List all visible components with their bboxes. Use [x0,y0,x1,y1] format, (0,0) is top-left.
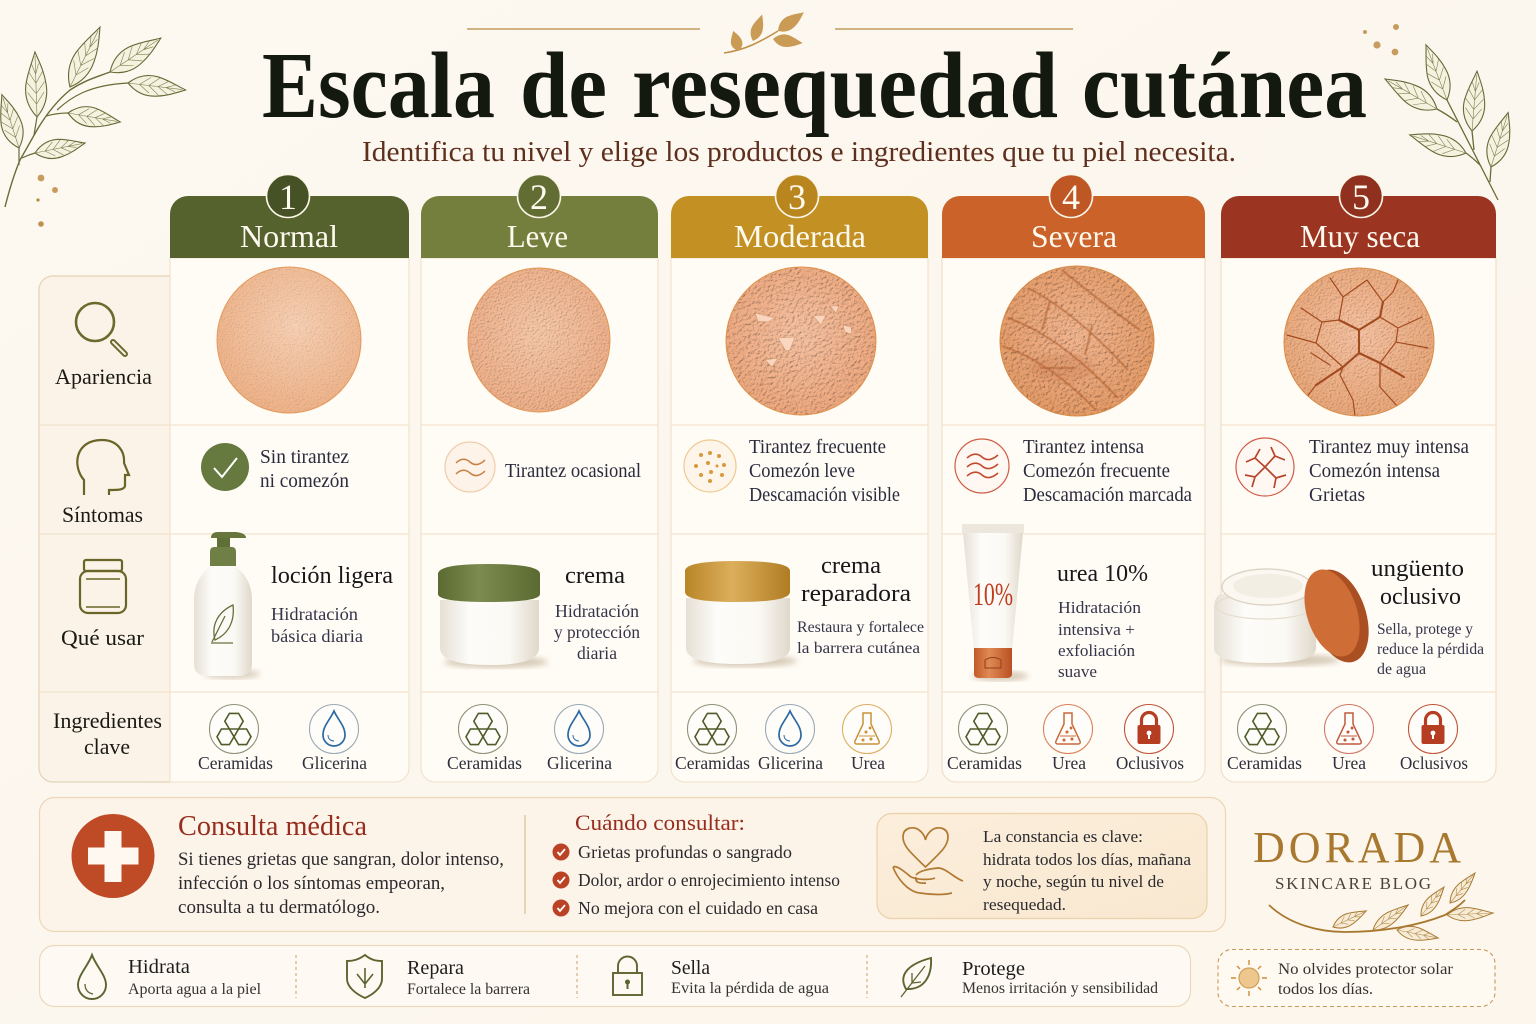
product: gold jar [685,561,797,667]
product: green jar [438,564,548,668]
benefit: sella: Sella [671,957,710,979]
product text: crema reparadora [797,553,924,657]
symptoms: muy seca: Grietas [1309,484,1365,506]
panel: level 4 Severa [942,174,1205,782]
symptoms: normal: ni comezón [260,470,349,492]
product text: urea 10%: urea 10% [1057,561,1148,587]
logo: Dorada skincare blog: SKINCARE BLOG [1275,874,1431,893]
symptoms: leve: Tirantez ocasional [505,460,641,482]
ingredient: glicerina [302,704,367,773]
label: Apariencia [55,303,152,389]
logo: Dorada skincare blog [1253,823,1493,944]
ingredient: oclusivos [1400,704,1468,773]
symptoms: normal: Sin tirantez [260,446,349,468]
product: open jar with orange lid [1214,562,1380,670]
header: Normal: Normal [240,218,338,254]
title [262,34,1367,138]
product text: ungüento oclusivo: reduce la pérdida [1377,641,1484,658]
header: Leve: 2 [530,177,548,217]
header: Severa [942,174,1205,258]
header: Moderada [671,174,928,258]
product: urea tube: 10% [973,577,1013,613]
ingredient: oclusivos [1116,704,1184,773]
product text: crema [554,563,640,663]
benefit: sella: Evita la pérdida de agua [671,980,829,997]
skin sample: moderada with flakes [726,267,876,415]
title: de [520,34,607,138]
icon: sun [1231,960,1267,996]
benefit: protege: Protege [962,958,1025,980]
header: Moderada: 3 [788,177,806,217]
label: Apariencia: Apariencia [55,364,152,389]
skin sample: severa with diagonal fissures [1000,266,1154,416]
product: urea tube [962,524,1028,681]
ingredient: oclusivos: Oclusivos [1116,753,1184,773]
symptoms: normal [201,443,349,492]
product text: crema reparadora: crema [821,553,881,579]
title: Escala [262,34,495,138]
benefit: protege [901,958,1158,997]
product text: ungüento oclusivo: Sella, protege y [1377,621,1473,638]
header: Normal: 1 [279,177,297,217]
product text: crema reparadora: Restaura y fortalece [797,619,924,636]
ingredient: urea [1044,704,1092,773]
symptoms: moderada: Comezón leve [749,460,855,482]
benefit: sella [613,956,829,997]
callout: la constancia es clave: y noche, según tu nivel de [983,872,1164,891]
icon: medical cross [72,814,154,898]
product text: crema: crema [565,563,625,589]
skin sample: normal [217,267,361,413]
benefit: hidrata: Hidrata [128,956,190,978]
benefit: repara: Repara [407,957,464,979]
callout: la constancia es clave [877,814,1207,918]
symptoms: moderada: Descamación visible [749,484,900,506]
callout: protector solar: No olvides protector solar [1278,961,1454,978]
product text: urea 10%: intensiva + [1058,620,1135,639]
callout: protector solar [1218,950,1495,1006]
benefit: repara: Fortalece la barrera [407,981,530,998]
header: Muy seca: 5 [1352,177,1370,217]
symptoms: muy seca: Comezón intensa [1309,460,1440,482]
ingredient: ceramidas [947,704,1022,773]
header: Muy seca [1221,174,1496,258]
ingredient: glicerina: Glicerina [758,753,823,773]
symptoms: leve [445,442,641,492]
label: Qué usar [61,560,145,650]
panel: row labels [39,276,171,782]
list: cuándo consultar: No mejora con el cuidado en casa [578,898,818,918]
ingredient: oclusivos: Oclusivos [1400,753,1468,773]
header: Leve [421,174,658,258]
header: Severa: Severa [1031,218,1117,254]
label: Ingredientes clave [53,708,162,759]
text: consulta médica [178,811,504,918]
ingredient: glicerina: Glicerina [302,753,367,773]
decorative branch: top right [1363,24,1518,200]
label: Qué usar: Qué usar [61,625,145,650]
ingredient: ceramidas: Ceramidas [198,753,273,773]
subtitle: Identifica tu nivel y elige los productos e ingredientes que tu piel necesita. [362,137,1236,168]
product text: crema reparadora: la barrera cutánea [797,640,920,657]
product text: crema: Hidratación [555,601,639,621]
decorative branch: top left [0,22,187,227]
icon: heart in hand [893,828,963,894]
label: Síntomas: Síntomas [62,502,143,527]
skin sample: leve [468,268,610,412]
ingredient: glicerina [758,704,823,773]
callout: la constancia es clave: hidrata todos los días, mañana [983,850,1191,869]
ingredient: ceramidas [447,704,522,773]
ingredient: urea: Urea [851,753,885,773]
panel: level 5 Muy seca [1214,174,1496,782]
symptoms: severa: Descamación marcada [1023,484,1192,506]
product text: urea 10%: exfoliación [1058,641,1136,660]
ingredient: ceramidas [1227,704,1302,773]
ingredient: ceramidas: Ceramidas [947,753,1022,773]
ingredient: ceramidas [675,704,750,773]
logo: Dorada skincare blog: DORADA [1253,823,1461,872]
symptoms: moderada [684,436,900,506]
symptoms: severa: Tirantez intensa [1023,436,1144,458]
skin sample: muy seca with cracks [1284,268,1434,416]
product text: urea 10% [1057,561,1148,681]
ingredient: ceramidas: Ceramidas [1227,753,1302,773]
list: cuándo consultar: Dolor, ardor o enrojecimiento intenso [578,870,840,890]
symptoms: moderada: Tirantez frecuente [749,436,886,458]
header: Severa: 4 [1062,177,1080,217]
panel: level 3 Moderada [671,174,928,782]
text: consulta médica: infección o los síntomas empeoran, [178,873,445,894]
header: Moderada: Moderada [734,218,866,254]
header: Normal [170,174,409,258]
product text: ungüento oclusivo: oclusivo [1380,584,1461,610]
product text: ungüento oclusivo: ungüento [1371,556,1464,582]
symptoms: severa: Comezón frecuente [1023,460,1170,482]
symptoms: muy seca [1236,436,1469,506]
benefit: hidrata [78,955,261,999]
product text: crema: diaria [577,643,617,663]
title: cutánea [1082,34,1367,138]
ingredient: glicerina: Glicerina [547,753,612,773]
product text: crema: y protección [554,622,640,642]
text: consulta médica: Consulta médica [178,811,368,842]
product text: loción ligera: Hidratación [271,604,358,624]
ingredient: ceramidas: Ceramidas [447,753,522,773]
ingredient: glicerina [547,704,612,773]
callout: protector solar: todos los días. [1278,981,1373,998]
ingredient: urea [1324,704,1374,773]
product text: urea 10%: Hidratación [1058,598,1142,617]
ingredient: urea: Urea [1332,753,1366,773]
top ornament: gold sprig and rules [467,7,1073,53]
label: Ingredientes clave: clave [84,734,130,759]
product text: loción ligera: básica diaria [271,626,363,646]
benefit: hidrata: Aporta agua a la piel [128,981,261,998]
panel: benefits strip [40,946,1190,1006]
product text: crema reparadora: reparadora [801,581,911,607]
product text: loción ligera [271,563,393,646]
text: consulta médica: Si tienes grietas que sangran, dolor intenso, [178,849,504,870]
ingredient: ceramidas: Ceramidas [675,753,750,773]
ingredient: urea: Urea [1052,753,1086,773]
product text: ungüento oclusivo: de agua [1377,661,1426,678]
label: Ingredientes clave: Ingredientes [53,708,162,733]
text: consulta médica: consulta a tu dermatólogo. [178,897,380,918]
list: cuándo consultar: Cuándo consultar: [575,810,745,835]
product text: loción ligera: loción ligera [271,563,393,589]
product text: urea 10%: suave [1058,662,1097,681]
panel: consulta médica [40,798,1226,932]
list: cuándo consultar [552,810,840,918]
title: resequedad [632,34,1058,138]
benefit: repara [347,955,530,998]
header: Muy seca: Muy seca [1300,218,1420,254]
panel: level 2 Leve [421,174,658,782]
ingredient: urea [842,704,892,773]
symptoms: muy seca: Tirantez muy intensa [1309,436,1469,458]
list: cuándo consultar: Grietas profundas o sangrado [578,842,792,862]
header: Leve: Leve [507,218,568,254]
panel: level 1 Normal [170,174,409,782]
callout: la constancia es clave: resequedad. [983,895,1066,914]
symptoms: severa [955,436,1192,506]
product text: ungüento oclusivo [1371,556,1484,678]
label: Síntomas [62,440,143,527]
benefit: protege: Menos irritación y sensibilidad [962,980,1158,997]
callout: la constancia es clave: La constancia es clave: [983,827,1143,846]
ingredient: ceramidas [198,704,273,773]
product: lotion bottle [194,532,260,679]
